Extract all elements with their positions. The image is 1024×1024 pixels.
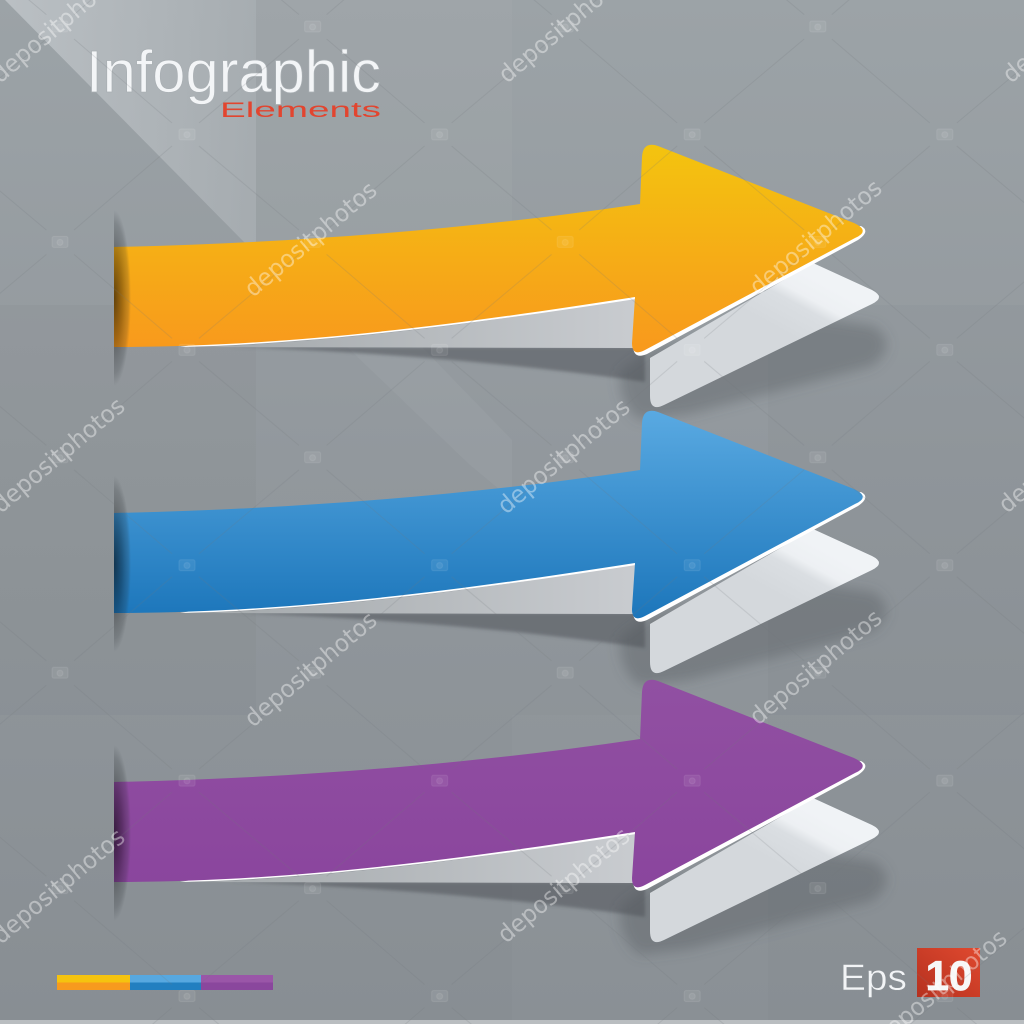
folded flap (200, 564, 636, 614)
watermarks: depositphotos (492, 393, 635, 520)
arrow: orange (97, 145, 887, 420)
arrow body (114, 411, 863, 618)
light beam (5, 0, 256, 252)
watermarks: depositphotos (744, 604, 887, 731)
subtitle: Elements (220, 99, 381, 122)
arrow body (114, 680, 863, 887)
white edge (180, 492, 865, 622)
white edge (180, 761, 865, 891)
folded flap (200, 298, 636, 348)
arrow body (114, 145, 863, 352)
eps badge (840, 948, 980, 999)
folded flap (200, 833, 636, 883)
colour legend bar (57, 975, 273, 990)
watermarks: depositphotos (239, 606, 382, 733)
watermarks: depositphotos (744, 174, 887, 301)
red box (917, 948, 980, 997)
slit shadow (114, 481, 130, 646)
slit shadow (114, 750, 130, 916)
folded head (650, 263, 879, 407)
version number: 10 (926, 952, 972, 999)
eps badge: Eps (840, 957, 907, 998)
cast shadows (230, 853, 887, 955)
cast shadows (230, 584, 887, 686)
white edge (180, 226, 865, 356)
folded head (650, 529, 879, 673)
watermarks: depositphotos (492, 822, 635, 949)
arrow: blue (97, 411, 887, 686)
title: Infographic (86, 39, 381, 105)
cast shadows (230, 318, 887, 420)
watermarks: depositphotos (239, 176, 382, 303)
folded head (650, 798, 879, 942)
slit shadow (114, 215, 130, 381)
arrow: purple (97, 680, 887, 955)
